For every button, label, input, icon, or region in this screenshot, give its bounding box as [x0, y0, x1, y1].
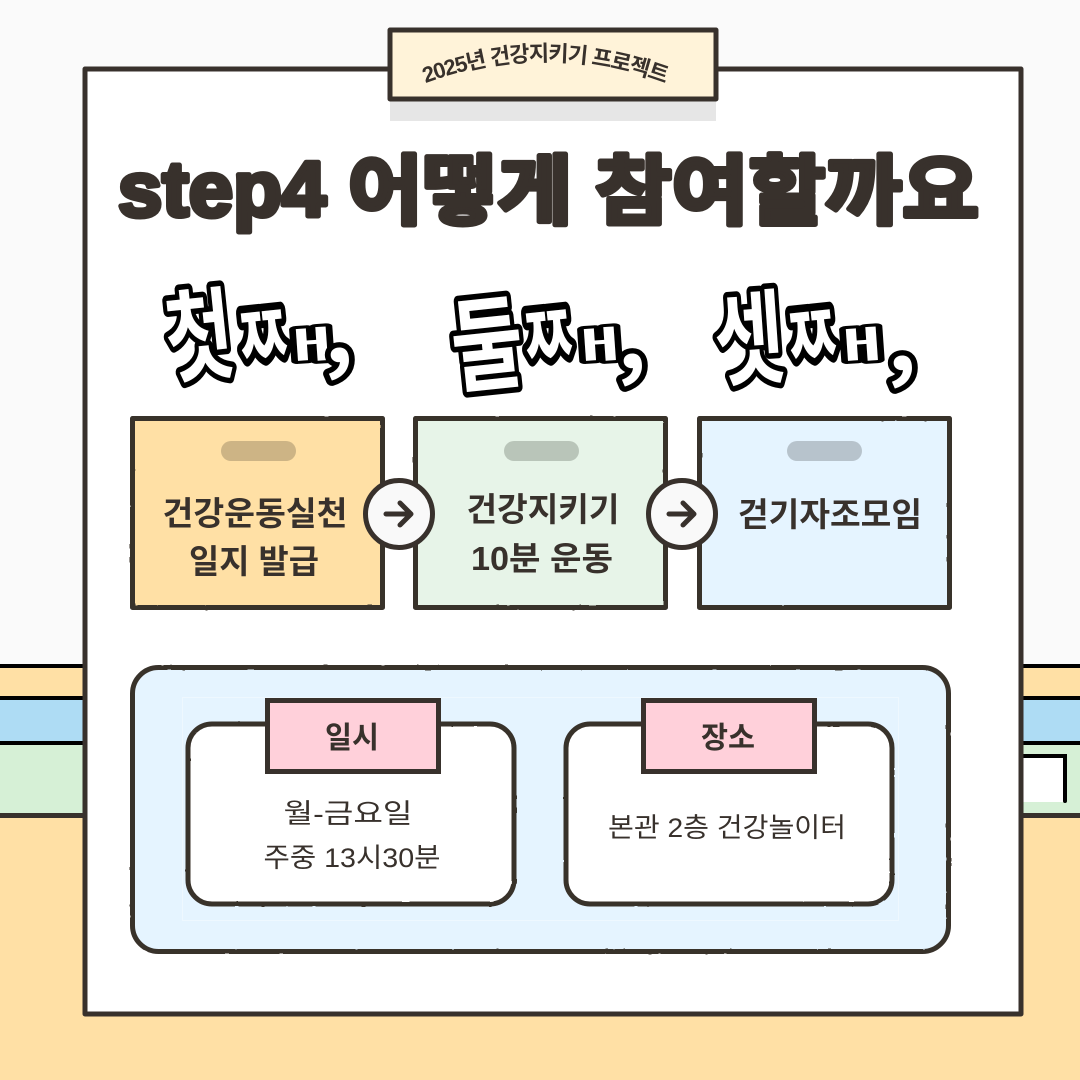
step card 1: 건강운동실천 — [162, 495, 348, 532]
place card — [566, 700, 892, 904]
badge: project name: 2025년 건강지키기 프로젝트 — [422, 42, 668, 83]
step card 3: 걷기자조모임 — [738, 496, 922, 533]
badge shadow — [390, 100, 716, 121]
hand lettering: third: , — [887, 273, 917, 395]
date and time card: 주중 13시30분 — [264, 843, 440, 873]
hand lettering: second: ㅐ — [560, 313, 638, 372]
hand lettering: first: ㅉ — [230, 265, 294, 397]
place card: 본관 2층 건강놀이터 — [608, 813, 846, 843]
date and time card: 월-금요일 — [284, 799, 412, 829]
hand lettering: first: , — [324, 265, 354, 387]
hand lettering: first: 첫 — [157, 254, 240, 405]
date and time card: 일시 — [325, 722, 379, 755]
hand lettering: second: ㅉ — [515, 265, 579, 397]
badge: project name — [388, 28, 718, 102]
place card: 장소 — [701, 722, 755, 755]
step card 3 — [700, 418, 950, 608]
step card 2: 건강지키기 — [466, 491, 620, 528]
hand lettering: third — [709, 255, 917, 408]
arrow icon 2 — [648, 480, 716, 548]
hand lettering: first — [157, 254, 354, 405]
hand lettering: second — [443, 260, 647, 415]
title — [118, 145, 979, 235]
main white panel — [85, 69, 1021, 1014]
hand lettering: second: , — [617, 271, 647, 393]
step card 2 — [416, 418, 666, 608]
hand lettering: third: ㅐ — [822, 313, 900, 372]
hand lettering: second: 둘 — [443, 260, 530, 415]
date and time card — [188, 700, 514, 904]
info panel — [132, 668, 948, 952]
step card 1: 일지 발급 — [189, 543, 319, 580]
step card 1 — [132, 418, 382, 608]
step card 2: 10분 운동 — [471, 540, 613, 577]
hand lettering: third: ㅉ — [779, 265, 843, 397]
hand lettering: third: 셋 — [709, 255, 789, 408]
title: step4 — [118, 145, 326, 233]
title: 참여할까요 — [595, 150, 979, 235]
hand lettering: first: ㅐ — [272, 313, 350, 372]
arrow icon 1 — [366, 480, 432, 548]
title: 어떻게 — [348, 150, 572, 235]
